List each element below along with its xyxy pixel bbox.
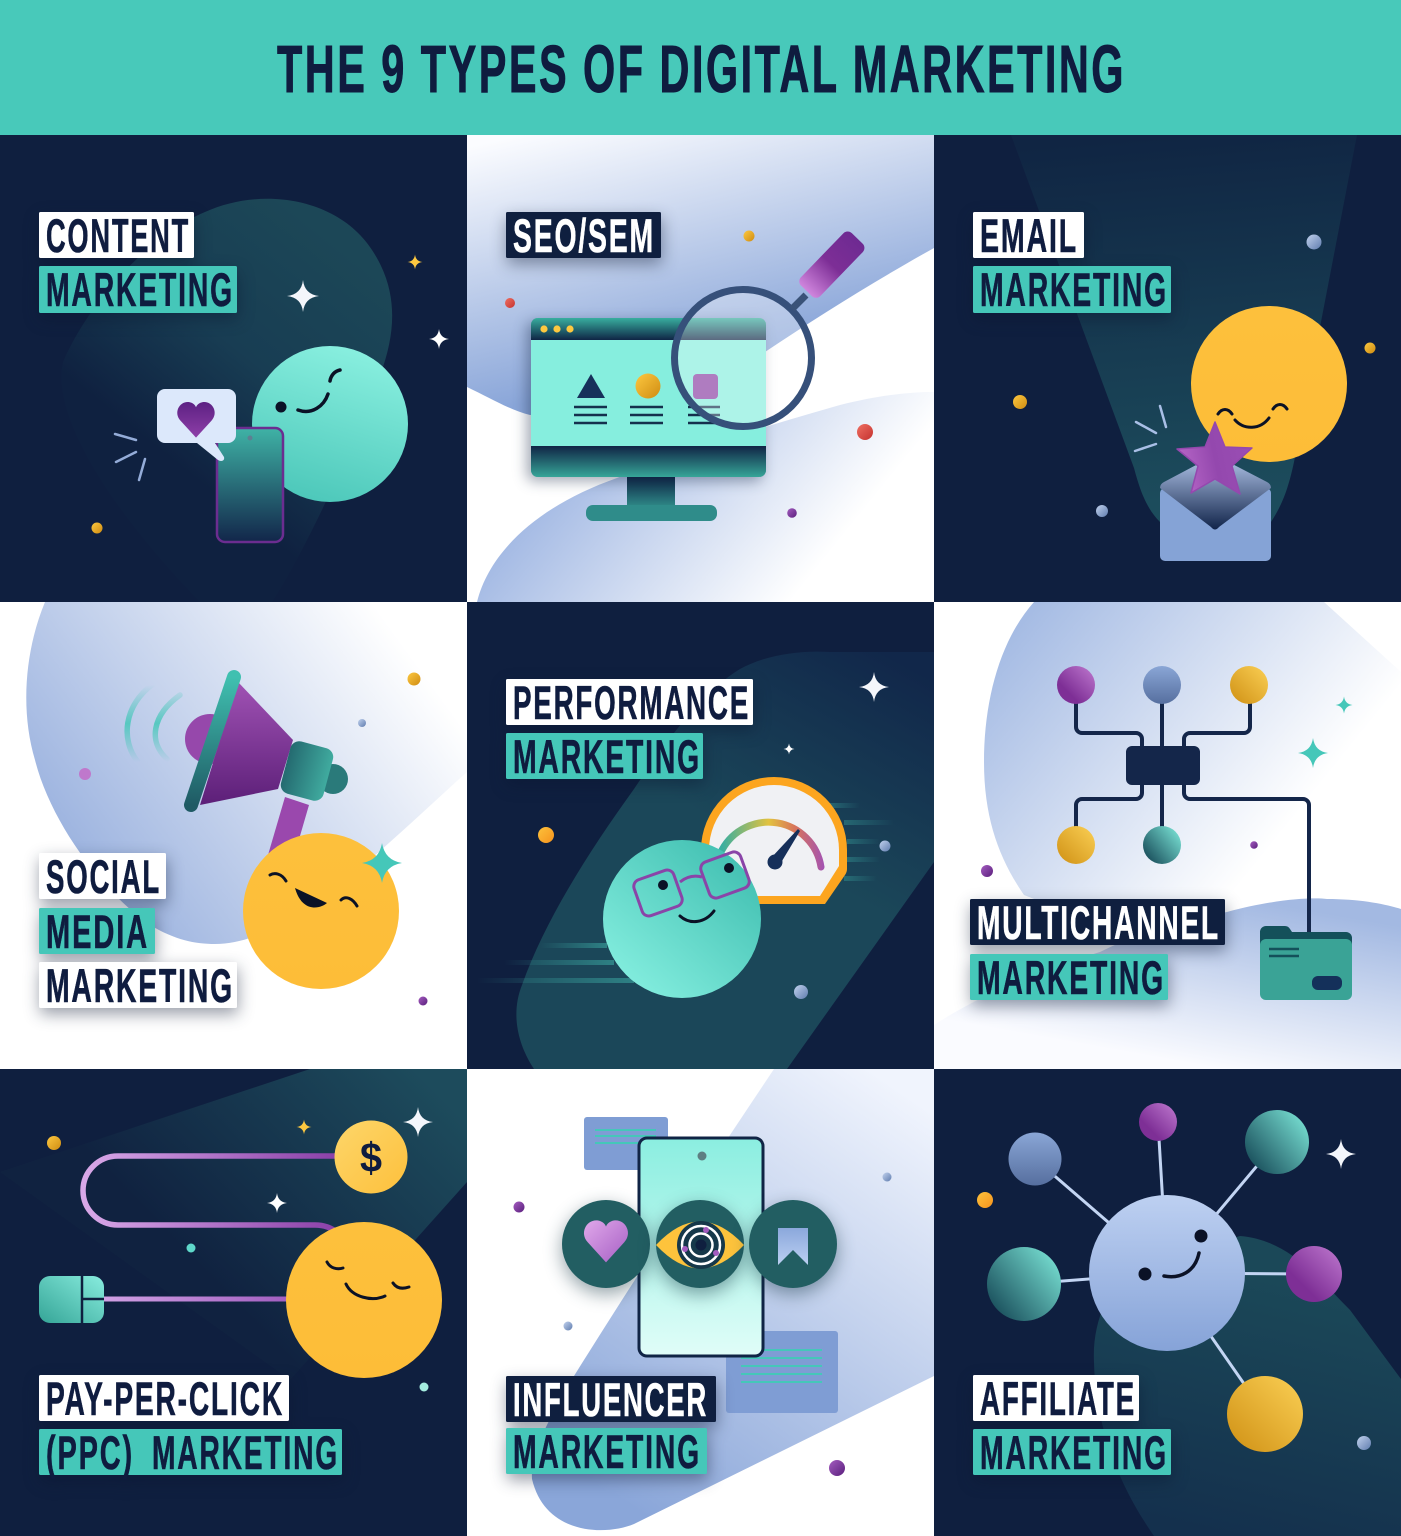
icon: spark ticks (115, 434, 145, 480)
icon: eye badge (656, 1200, 744, 1288)
dots (1013, 234, 1376, 517)
cable to coin (83, 1156, 338, 1233)
label: performance marketing (506, 676, 753, 783)
icon: phone (639, 1138, 763, 1356)
glasses (632, 850, 751, 918)
panel: social media marketing (26, 602, 460, 1025)
sparkle stars (267, 1107, 433, 1213)
background blob (26, 602, 467, 944)
dot (92, 522, 102, 534)
sparkle star (362, 843, 402, 883)
label: influencer marketing (506, 1373, 716, 1478)
flow connectors (1076, 700, 1309, 936)
label: content marketing: CONTENT (46, 209, 190, 262)
label: email marketing: MARKETING (980, 263, 1168, 316)
label: multichannel marketing (970, 896, 1225, 1004)
panel: multichannel marketing (934, 602, 1401, 1069)
light beam (1011, 135, 1357, 522)
label: pay-per-click marketing: (PPC) (46, 1426, 134, 1479)
character: teal face with glasses (603, 840, 761, 998)
character: teal smiling face (252, 346, 408, 502)
icon: speech bubble with heart (157, 389, 236, 461)
panel: performance marketing (467, 602, 934, 1069)
label: affiliate marketing (973, 1372, 1171, 1479)
character: yellow face (286, 1222, 442, 1378)
chip (1126, 746, 1200, 785)
label: pay-per-click marketing: MARKETING (152, 1426, 339, 1479)
background blob (532, 1069, 934, 1530)
card with lines: bottom right (726, 1331, 838, 1413)
sparkle stars (784, 672, 889, 754)
icon: sound waves (127, 684, 180, 762)
icon: dollar coin: $ (360, 1134, 382, 1181)
label: pay-per-click marketing (39, 1372, 342, 1479)
light beam (0, 1069, 467, 1380)
icon: heart badge (562, 1200, 650, 1288)
label: seo/sem (506, 209, 661, 262)
label: social media marketing (39, 850, 237, 1012)
label: pay-per-click marketing: PAY-PER-CLICK (46, 1372, 284, 1425)
icon: mouse (39, 1276, 104, 1323)
background blob (72, 198, 392, 534)
bottom background blob (477, 392, 934, 602)
card with lines: top left (584, 1117, 668, 1170)
label: influencer marketing: MARKETING (513, 1425, 701, 1478)
sparkle stars (287, 254, 449, 349)
sparkle stars (1298, 696, 1352, 768)
label: social media marketing: SOCIAL (46, 850, 161, 903)
label: email marketing (973, 209, 1171, 316)
label: social media marketing: MEDIA (46, 905, 149, 958)
icon: envelope with star (1160, 422, 1271, 561)
cable to mouse (104, 1296, 292, 1302)
icon: magnifying glass (674, 229, 867, 426)
panel: email marketing (934, 135, 1401, 602)
dots (977, 1192, 1371, 1450)
icon: spark ticks (1135, 406, 1166, 451)
icon: phone (217, 428, 283, 542)
label: multichannel marketing: MULTICHANNEL (977, 896, 1220, 949)
dots (47, 1136, 428, 1392)
panel: affiliate marketing (934, 1069, 1401, 1536)
panel: content marketing (0, 135, 467, 602)
top background blob (984, 602, 1401, 933)
dots (505, 230, 873, 518)
label: performance marketing: PERFORMANCE (513, 676, 750, 729)
icon: monitor (531, 318, 766, 521)
icon: dollar coin (334, 1120, 408, 1194)
background blob (1094, 1236, 1401, 1536)
label: email marketing: EMAIL (980, 209, 1078, 262)
network nodes (987, 1103, 1342, 1452)
title banner (0, 0, 1401, 135)
label: performance marketing: MARKETING (513, 730, 701, 783)
icon: bookmark badge (749, 1200, 837, 1288)
nodes (1057, 666, 1268, 864)
label: influencer marketing: INFLUENCER (513, 1373, 708, 1426)
dots (79, 672, 428, 1006)
dots (514, 1172, 892, 1476)
sparkle star (1326, 1139, 1356, 1169)
bottom background blob (934, 898, 1401, 1069)
label: seo/sem: SEO/SEM (513, 209, 655, 262)
icon: speedometer gauge (701, 777, 847, 904)
dots (538, 827, 890, 999)
panel: influencer marketing (467, 1069, 934, 1536)
label: multichannel marketing: MARKETING (977, 951, 1165, 1004)
label: social media marketing: MARKETING (46, 959, 234, 1012)
label: affiliate marketing: AFFILIATE (980, 1372, 1136, 1425)
label: content marketing (39, 209, 237, 316)
top background blob (467, 135, 934, 415)
panel: seo/sem (467, 135, 934, 602)
speed lines (477, 803, 894, 983)
label: affiliate marketing: MARKETING (980, 1426, 1168, 1479)
dots (981, 841, 1258, 877)
background blob (516, 652, 934, 1069)
panel: pay-per-click marketing (0, 1069, 467, 1536)
character: blue face (1089, 1195, 1245, 1351)
icon: folder (1260, 926, 1352, 1000)
label: content marketing: MARKETING (46, 263, 234, 316)
icon: megaphone (185, 677, 348, 860)
character: laughing yellow face (243, 833, 399, 989)
network spokes (1024, 1122, 1314, 1414)
character: yellow face (1191, 306, 1347, 462)
